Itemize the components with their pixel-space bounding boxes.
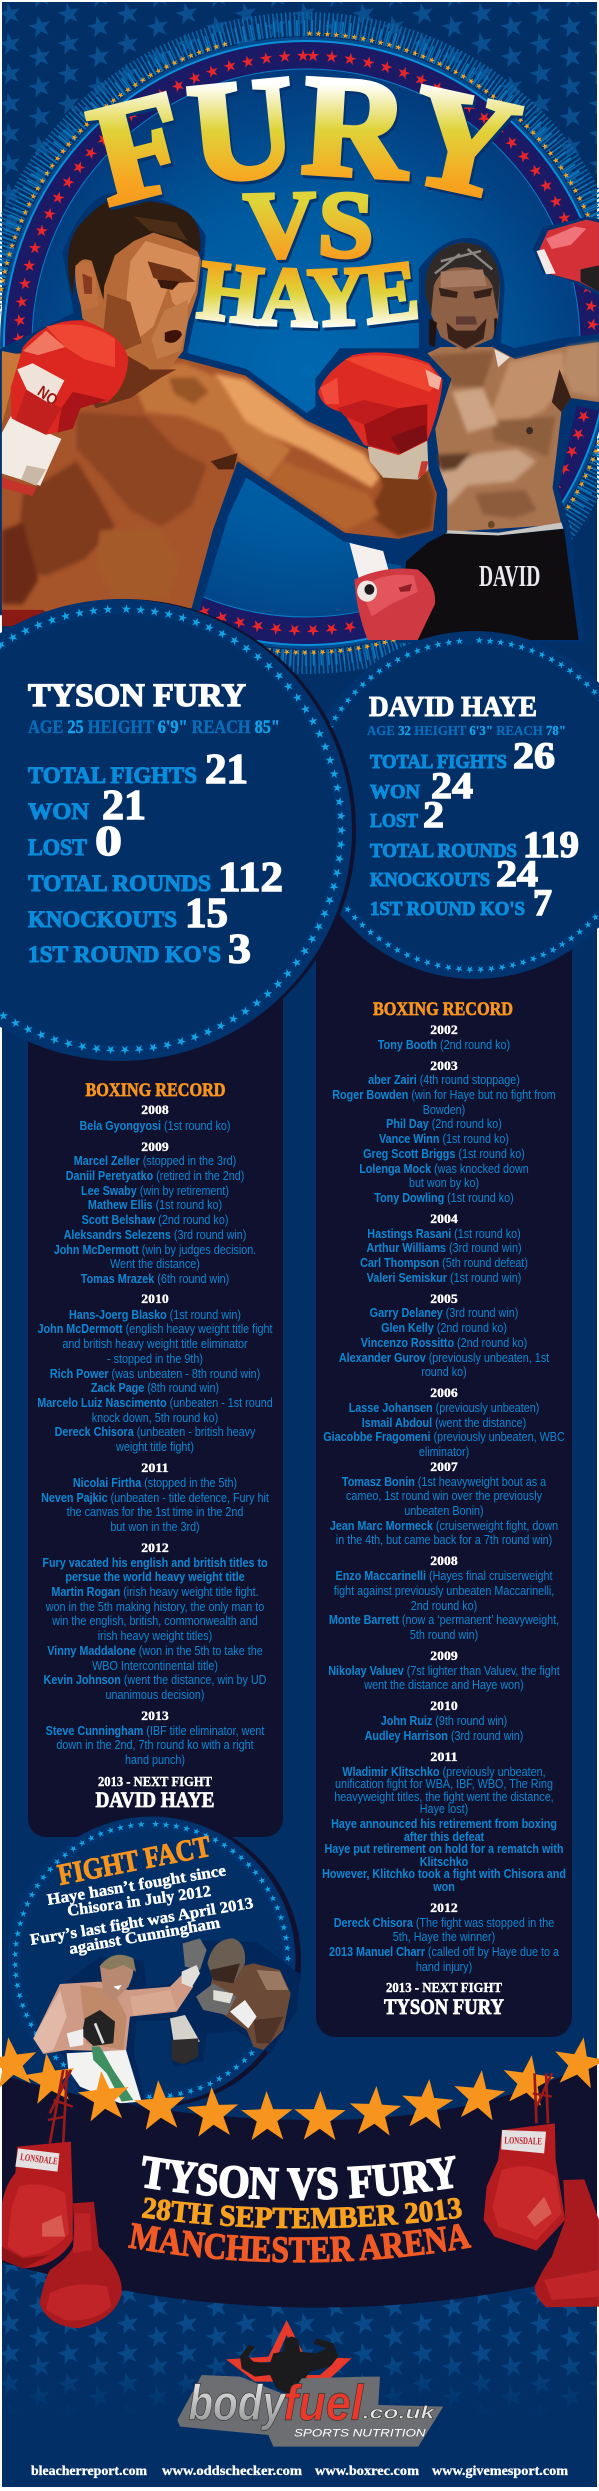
left boxer head [100, 1956, 134, 2002]
event venue: MANCHESTER ARENA [128, 2222, 472, 2263]
glove two [535, 2179, 599, 2307]
left boxer torso [33, 1975, 193, 2054]
record lines: cameo, 1st round win over the previously [346, 1488, 542, 1503]
record lines: Tony Dowling (1st round ko) [374, 1190, 514, 1205]
logo: bodyfuel: .co.uk [363, 2403, 436, 2423]
logo: bodyfuel [177, 2320, 443, 2447]
record lines: aber Zairi (4th round stoppage) [368, 1072, 520, 1087]
record lines: Lasse Johansen (previously unbeaten) [349, 1400, 539, 1415]
name: DAVID HAYE [369, 691, 537, 723]
record lines: Martin Rogan (irish heavy weight title fight. [51, 1584, 259, 1599]
title: FURY VS HAYE: HAYE [195, 260, 419, 332]
stats: WON [370, 781, 421, 803]
waistband [440, 522, 563, 536]
record lines: Hans-Joerg Blasko (1st round win) [69, 1307, 241, 1322]
figure: David Haye [345, 218, 599, 640]
record lines: irish heavy weight titles) [98, 1628, 212, 1643]
next opponent: DAVID HAYE [96, 1787, 214, 1812]
footer sources: www.oddschecker.com [162, 2464, 302, 2479]
stats: TOTAL ROUNDS [370, 840, 517, 862]
left boxer glove [82, 2010, 115, 2046]
raised glove [183, 1938, 207, 1970]
record lines: but won in the 3rd) [110, 1519, 200, 1534]
event title: TYSON VS FURY [142, 2155, 456, 2200]
record lines: Zack Page (8th round win) [91, 1380, 219, 1395]
stats: LOST [28, 835, 87, 860]
record lines [37, 1102, 273, 1767]
record lines: Vance Winn (1st round ko) [379, 1131, 509, 1146]
record lines: 2005 [430, 1291, 458, 1306]
record lines: weight title fight) [115, 1439, 194, 1454]
red trunks edge [2, 610, 44, 626]
record lines: Lolenga Mock (was knocked down [359, 1161, 529, 1176]
record lines: Ismail Abdoul (went the distance) [362, 1415, 526, 1430]
record lines: hand punch) [125, 1752, 185, 1767]
stats: TOTAL ROUNDS [28, 871, 211, 896]
stats: LOST [370, 810, 419, 832]
record lines: 5th, Haye the winner) [393, 1929, 495, 1944]
logo: bodyfuel: fuel [283, 2375, 364, 2431]
stats: 21 [102, 783, 146, 829]
title: FURY VS HAYE [84, 76, 526, 332]
shadow [37, 1941, 300, 2107]
next fight: 2013 - NEXT FIGHT [386, 1981, 503, 1996]
record lines: John McDermott (win by judges decision. [54, 1242, 256, 1257]
record lines: Garry Delaney (3rd round win) [370, 1305, 518, 1320]
stats: 3 [228, 927, 251, 973]
stats: 24 [496, 854, 538, 895]
stats: 21 [205, 747, 248, 793]
label [15, 2148, 59, 2172]
logo star [226, 2320, 352, 2382]
heading: BOXING RECORD [373, 999, 513, 1020]
label [501, 2130, 546, 2153]
halo around Haye [345, 241, 599, 640]
stats: KNOCKOUTS [28, 907, 177, 932]
record lines: Vincenzo Rossitto (2nd round ko) [361, 1335, 527, 1350]
record lines: Roger Bowden (win for Haye but no fight from [332, 1087, 556, 1102]
record lines: Dereck Chisora (The fight was stopped in the [334, 1915, 555, 1930]
record lines: unification fight for WBA, IBF, WBO, The Ring [335, 1776, 553, 1791]
record lines: round ko) [421, 1364, 467, 1379]
ear [75, 262, 99, 310]
record lines: Lee Swaby (win by retirement) [81, 1183, 229, 1198]
record lines: 2013 Manuel Charr (called off by Haye due to a [329, 1944, 559, 1959]
record lines: went the distance and Haye won) [363, 1677, 524, 1692]
record lines: 2003 [430, 1058, 458, 1073]
record lines: 2004 [430, 1211, 458, 1226]
stats: 0 [95, 819, 122, 865]
record lines: 2011 [141, 1460, 169, 1475]
record lines: the canvas for the 1st time in the 2nd [67, 1504, 243, 1519]
vitals: AGE 25 HEIGHT 6'9" REACH 85" [28, 717, 280, 738]
lower glove [349, 543, 389, 584]
glove two [39, 2202, 122, 2328]
hanging gloves right [484, 2073, 599, 2307]
record lines: Greg Scott Briggs (1st round ko) [363, 1146, 525, 1161]
laces [533, 2073, 552, 2123]
record lines: won in the 5th making history, the only man to [45, 1599, 265, 1614]
record lines: John Ruiz (9th round win) [381, 1713, 507, 1728]
next fight: 2013 - NEXT FIGHT [98, 1775, 213, 1790]
stats: KNOCKOUTS [370, 869, 490, 891]
record lines: won [432, 1879, 455, 1894]
record lines: but won by ko) [409, 1175, 479, 1190]
hair [68, 199, 200, 300]
facts [29, 1862, 255, 1958]
record lines: Bela Gyongyosi (1st round ko) [79, 1118, 231, 1133]
facts: Fury’s last fight was April 2013 [29, 1895, 255, 1949]
record lines: 2012 [430, 1900, 458, 1915]
record lines: Rich Power (was unbeaten - 8th round win) [50, 1366, 260, 1381]
record lines: Arthur Williams (3rd round win) [366, 1240, 522, 1255]
footer sources: www.givemesport.com [432, 2464, 568, 2479]
record lines: - stopped in the 9th) [107, 1351, 203, 1366]
garland of orange stars [0, 2033, 599, 2140]
record lines: Kevin Johnson (went the distance, win by UD [44, 1672, 267, 1687]
stats: 1ST ROUND KO'S [28, 942, 221, 967]
record lines: Glen Kelly (2nd round ko) [381, 1320, 507, 1335]
record lines: Audley Harrison (3rd round win) [365, 1728, 523, 1743]
record lines: Haye announced his retirement from boxing [331, 1816, 557, 1831]
figure: David Haye: DAVID [479, 560, 540, 593]
facts: Chisora in July 2012 [66, 1883, 212, 1920]
stats: TOTAL FIGHTS [370, 751, 507, 773]
stats: TOTAL FIGHTS [28, 763, 197, 788]
record lines: knock down, 5th round ko) [92, 1410, 218, 1425]
hanging gloves left [2, 2070, 122, 2328]
body [2, 343, 437, 612]
record lines: Jean Marc Mormeck (cruiserweight fight, down [330, 1518, 558, 1533]
hanging gloves right: LONSDALE [504, 2135, 542, 2147]
heading: BOXING RECORD [86, 1080, 226, 1101]
heading: FIGHT FACT [55, 1830, 213, 1892]
name: TYSON FURY [28, 678, 246, 714]
record lines: Carl Thompson (5th round defeat) [360, 1255, 528, 1270]
plaque [177, 2375, 443, 2447]
glove one [484, 2123, 565, 2251]
record lines [322, 1022, 566, 1974]
record lines: 2008 [430, 1553, 458, 1568]
record lines: Vinny Maddalone (won in the 5th to take the [47, 1643, 263, 1658]
record lines: 2010 [430, 1698, 458, 1713]
record lines: 2008 [141, 1102, 169, 1117]
record lines: 2009 [430, 1648, 458, 1663]
record lines: 2010 [141, 1291, 169, 1306]
right boxer head [207, 1938, 245, 1983]
record lines: 2007 [430, 1459, 458, 1474]
shorts [399, 529, 579, 640]
neck [84, 327, 176, 408]
footer sources [31, 2464, 568, 2479]
head [425, 243, 500, 351]
banner: event panel [2, 2060, 597, 2306]
stats [28, 747, 283, 973]
record lines: fight against previously unbeaten Maccarinelli, [334, 1583, 554, 1598]
record lines: Mathew Ellis (1st round ko) [88, 1197, 222, 1212]
record lines: Tomasz Bonin (1st heavyweight bout as a [342, 1474, 546, 1489]
panel: fight fact: ★★★★★★★★★★★★★★★★★★★★★★★★★★★★★★★★★★★★★★★★★★★★★★★★★★★★★★★★★★★★★★★★★★★★★★★★★★★★★★★★★★ [12, 1820, 292, 2100]
event date: 28TH SEPTEMBER 2013 [142, 2198, 462, 2228]
record lines: Hastings Rasani (1st round ko) [367, 1226, 521, 1241]
body shading [2, 363, 435, 604]
record lines: Monte Barrett (now a ‘permanent’ heavyweight, [329, 1612, 559, 1627]
right boxer body [207, 1963, 291, 2050]
torso [422, 342, 599, 533]
record lines: persue the world heavy weight title [65, 1569, 245, 1584]
punching glove [318, 352, 443, 455]
laces [48, 2070, 73, 2143]
vitals: AGE 32 HEIGHT 6'3" REACH 78" [367, 724, 566, 739]
record lines: Haye put retirement on hold for a rematch with [324, 1841, 564, 1856]
upper right glove [535, 218, 599, 294]
record lines: unanimous decision) [106, 1687, 204, 1702]
right boxer gloves [196, 1983, 237, 2015]
record lines: Alexander Gurov (previously unbeaten, 1st [339, 1350, 550, 1365]
record lines: 2011 [430, 1749, 458, 1764]
footer sources: www.boxrec.com [315, 2464, 419, 2479]
wrist wrap left [2, 416, 61, 486]
silhouettes [240, 2337, 338, 2395]
stats: 24 [431, 766, 473, 807]
record lines: Enzo Maccarinelli (Hayes final cruiserweight [336, 1568, 553, 1583]
record lines: Nicolai Firtha (stopped in the 5th) [73, 1475, 237, 1490]
record lines: Wladimir Klitschko (previously unbeaten, [342, 1764, 546, 1779]
record lines: Neven Pajkic (unbeaten - title defence, Fury hit [41, 1490, 269, 1505]
footer sources: bleacherreport.com [31, 2464, 147, 2479]
record lines: Dereck Chisora (unbeaten - british heavy [55, 1424, 255, 1439]
logo: bodyfuel: SPORTS NUTRITION [294, 2428, 426, 2440]
record lines: Bowden) [423, 1102, 465, 1117]
record lines: Fury vacated his english and british titles to [42, 1555, 268, 1570]
record lines: WBO Intercontinental title) [92, 1658, 218, 1673]
record lines: Tomas Mrazek (6th round win) [81, 1271, 229, 1286]
top background star pattern [2, 2, 597, 332]
hanging gloves left: LONSDALE [19, 2152, 58, 2167]
figures: two boxers [33, 1938, 300, 2107]
record lines: Marcel Zeller (stopped in the 3rd) [74, 1153, 236, 1168]
record lines: Nikolay Valuev (7st lighter than Valuev, the fight [328, 1663, 560, 1678]
stats: 26 [513, 736, 555, 777]
facts: Haye hasn’t fought since [46, 1862, 227, 1909]
record lines: Klitschko [420, 1854, 468, 1869]
stats: 119 [523, 825, 579, 866]
record lines: after this defeat [404, 1829, 484, 1844]
facts: against Cunningham [68, 1915, 222, 1958]
next opponent: TYSON FURY [384, 1994, 504, 2019]
record lines: John McDermott (english heavy weight title fight [38, 1321, 273, 1336]
record lines: and british heavy weight title eliminator [62, 1336, 248, 1351]
figure: Tyson Fury: NO [34, 382, 61, 410]
banner: event panel lower edge [2, 2255, 597, 2308]
record lines: Steve Cunningham (IBF title eliminator, went [46, 1723, 265, 1738]
record lines: 2nd round ko) [411, 1598, 477, 1613]
record lines: heavyweight titles, the fight went the distance, [334, 1789, 554, 1804]
record lines: Daniil Peretyatko (retired in the 2nd) [66, 1168, 244, 1183]
text: Fury boxing record [37, 1080, 273, 1812]
stats [370, 736, 579, 924]
title: FURY VS HAYE: VS [242, 191, 374, 263]
text: Haye boxing record [322, 999, 566, 2019]
record lines: down in the 2nd, 7th round ko with a right [56, 1737, 254, 1752]
record lines: 2006 [430, 1385, 458, 1400]
record lines: 2009 [141, 1139, 169, 1154]
record lines: eliminator) [419, 1444, 469, 1459]
record lines: hand injury) [416, 1959, 472, 1974]
stats: WON [28, 799, 89, 824]
record lines: Haye lost) [420, 1801, 468, 1816]
record lines: 5th round win) [410, 1627, 478, 1642]
record lines: win the english, british, commonwealth and [51, 1613, 258, 1628]
torso shading [429, 342, 599, 518]
record lines: Went the distance) [110, 1256, 200, 1271]
record lines: Phil Day (2nd round ko) [386, 1116, 502, 1131]
record lines: However, Klitchko took a fight with Chisora and [322, 1866, 566, 1881]
record lines: in the 4th, but came back for a 7th round win) [336, 1532, 552, 1547]
event text [128, 2155, 472, 2263]
record lines: 2002 [430, 1022, 458, 1037]
glove one [2, 2142, 73, 2268]
record lines: Marcelo Luiz Nascimento (unbeaten - 1st round [37, 1395, 273, 1410]
record lines: Giacobbe Fragomeni (previously unbeaten, WBC [323, 1429, 565, 1444]
record lines: 2012 [141, 1540, 169, 1555]
shorts [67, 2050, 142, 2103]
panel: boxing record Fury background [28, 950, 283, 1837]
record lines: Valeri Semiskur (1st round win) [367, 1270, 521, 1285]
title: FURY VS HAYE: FURY [84, 76, 526, 211]
bottom background star pattern [2, 2265, 597, 2415]
stats: 7 [533, 883, 552, 924]
punching arm wrap [368, 441, 428, 480]
head [75, 220, 201, 369]
panel: boxing record Haye background [316, 880, 572, 2037]
record lines: Scott Belshaw (2nd round ko) [82, 1212, 228, 1227]
figure: Tyson Fury [2, 195, 448, 626]
stats: 1ST ROUND KO'S [370, 898, 525, 920]
stats: 2 [423, 795, 444, 836]
record lines: Aleksandrs Selezens (3rd round win) [64, 1227, 246, 1242]
face shading [126, 241, 199, 339]
wordmark: body [188, 2375, 287, 2431]
halo around Fury [2, 195, 448, 612]
record lines: 2013 [141, 1708, 169, 1723]
record lines: unbeaten Bonin) [404, 1503, 484, 1518]
stats: 15 [185, 891, 228, 937]
record lines: Tony Booth (2nd round ko) [378, 1037, 510, 1052]
left guard glove [11, 320, 128, 435]
stats: 112 [218, 855, 283, 901]
